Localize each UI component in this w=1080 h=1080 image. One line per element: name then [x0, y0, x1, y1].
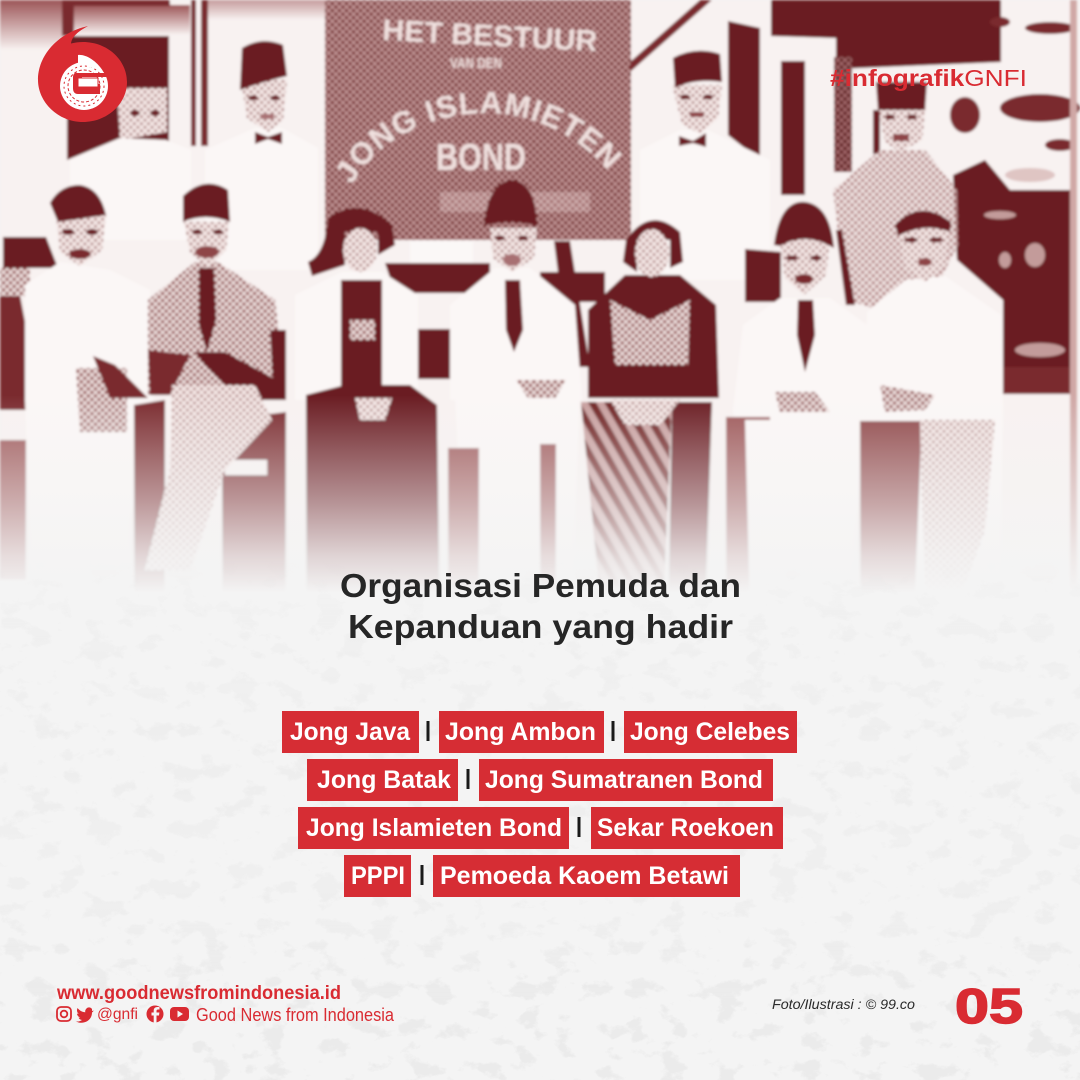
- seated 6: [726, 202, 867, 600]
- seated 1: [25, 185, 155, 600]
- back row person 3: [640, 51, 770, 280]
- back row person 4: [833, 82, 958, 310]
- foliage right: [950, 17, 1080, 151]
- tag row 3: Jong Islamieten Bond: [306, 814, 562, 842]
- title: Kepanduan yang hadir: [348, 608, 733, 645]
- banner lettering: VAN DEN: [450, 55, 502, 72]
- back row person 1: [70, 88, 191, 240]
- icon: instagram: [57, 1007, 71, 1021]
- doorway: [781, 61, 805, 195]
- pole: [191, 0, 208, 146]
- roof: [771, 0, 1001, 69]
- tag row 1: Jong Ambon: [445, 718, 596, 746]
- website url: www.goodnewsfromindonesia.id: [56, 983, 341, 1004]
- dark door behind back row: [67, 36, 169, 160]
- tag row 1: Jong Celebes: [630, 718, 790, 746]
- banner lettering: BOND: [436, 137, 526, 179]
- page number: 05: [955, 980, 1023, 1034]
- photo: Jong Islamieten Bond group portrait: [0, 0, 1080, 584]
- handle: @gnfi: [97, 1006, 138, 1023]
- tag row 1: [282, 711, 797, 753]
- icon: twitter: [76, 1007, 94, 1023]
- tag row 3: Sekar Roekoen: [597, 814, 774, 842]
- seated 5: [581, 220, 719, 600]
- tag row 2: Jong Sumatranen Bond: [485, 766, 763, 794]
- window: [728, 21, 760, 160]
- banner lettering: [336, 14, 624, 213]
- tag row 2: Jong Batak: [317, 766, 451, 794]
- seated 2: [134, 184, 286, 600]
- title: [340, 567, 741, 645]
- left dark band: [3, 237, 58, 268]
- building at right: roof brace: [630, 0, 712, 72]
- tag row 3: [298, 807, 783, 849]
- bench behind seated row: [380, 240, 631, 300]
- door frame: [62, 0, 170, 36]
- photo base: [0, 0, 1080, 606]
- tag row 4: Pemoeda Kaoem Betawi: [440, 862, 729, 890]
- organisation tags: [282, 711, 797, 897]
- seated 3: [295, 208, 440, 600]
- tag row 4: [344, 855, 740, 897]
- seated 4: [450, 180, 582, 600]
- title: Organisasi Pemuda dan: [340, 567, 741, 604]
- tag row 4: PPPI: [351, 862, 405, 890]
- photo credit: Foto/Ilustrasi : © 99.co: [772, 997, 916, 1012]
- wall upper left: [0, 0, 65, 50]
- back row person 2: [205, 41, 318, 270]
- logo: GNFI red drop with garuda ring: [38, 26, 127, 122]
- photo fade to paper: [0, 395, 1080, 625]
- brand name: Good News from Indonesia: [196, 1005, 395, 1025]
- icon: facebook: [146, 1006, 164, 1023]
- banner lettering: HET BESTUUR: [382, 14, 598, 58]
- seated 7: [860, 211, 1003, 600]
- banner lettering: JONG ISLAMIETEN: [336, 90, 624, 184]
- icon: youtube: [170, 1007, 189, 1021]
- banner: [325, 0, 631, 240]
- hashtag: #infografik GNFI: [830, 65, 1027, 91]
- chairs under front row: [448, 448, 479, 600]
- grunge texture: [0, 976, 1080, 1080]
- tag row 2: [307, 759, 773, 801]
- tag row 1: Jong Java: [290, 718, 411, 746]
